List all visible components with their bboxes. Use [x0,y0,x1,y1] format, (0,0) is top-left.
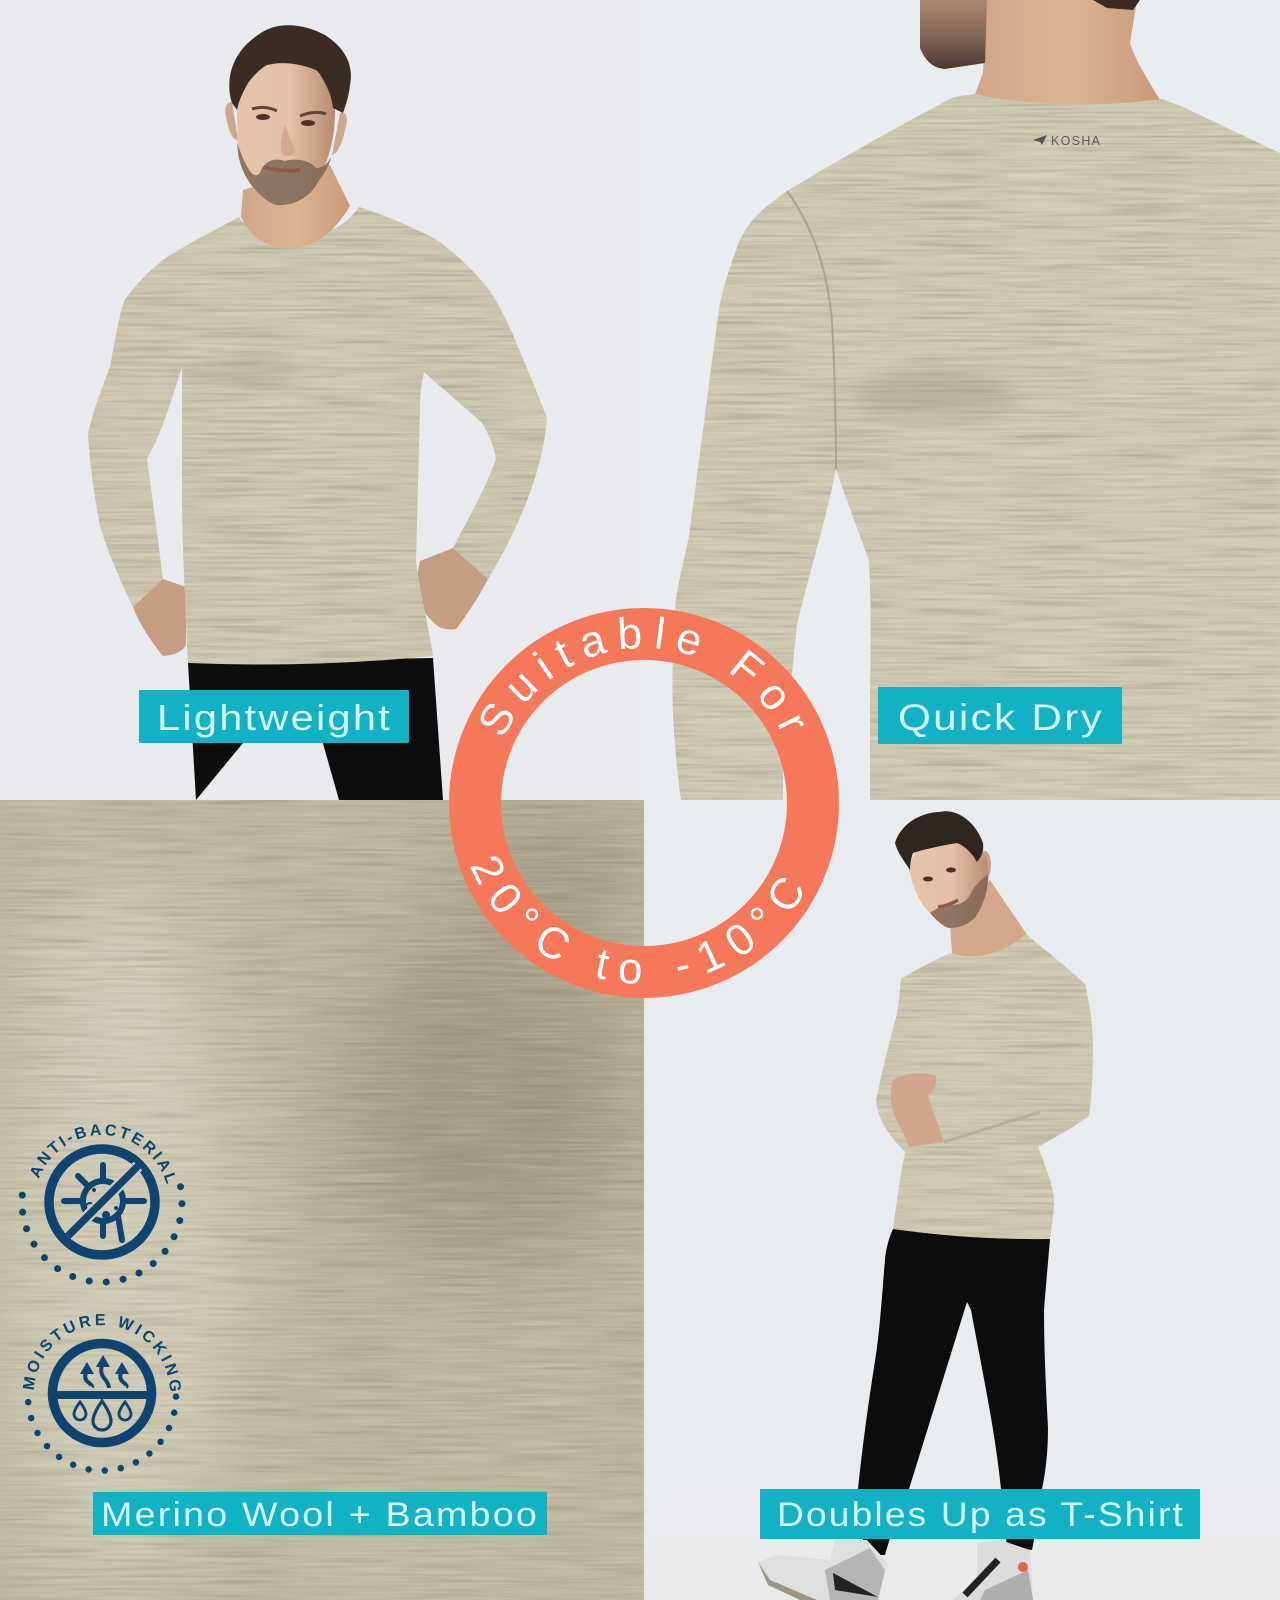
dotted ring [22,1187,182,1282]
label: Doubles Up as T-Shirt: Doubles Up as T-Shirt [777,1496,1185,1534]
long-sleeve top [870,930,1100,1250]
dotted ring [28,1397,176,1471]
neck [950,880,1032,966]
badge text: ANTI-BACTERIAL [30,1124,176,1184]
label: Quick Dry: Quick Dry [898,697,1104,738]
panel: lightweight photo [88,25,547,800]
long-sleeve top [80,200,560,680]
neck hairline [1093,0,1140,10]
face [908,840,988,928]
ring heading: temperature range: 20°C to -10°C [470,856,802,984]
figure: front-facing model [80,25,560,800]
eyes and mouth [923,868,958,907]
leggings [188,658,443,800]
badge: anti-bacterial [18,1124,186,1286]
label: Doubles Up as T-Shirt [760,1489,1200,1539]
badge ring: suitable temperature [449,608,839,998]
badge: moisture wicking [22,1314,181,1474]
label: Lightweight [139,690,409,743]
hands [891,1073,944,1147]
beard [930,875,988,928]
panel: doubles up as t-shirt photo [758,811,1200,1600]
beard [237,143,331,205]
figure: three-quarter model [758,811,1100,1600]
ring heading: Suitable For: Suitable For [480,616,804,734]
ears [225,102,347,155]
eyes and mouth [252,107,326,171]
label: Lightweight: Lightweight [157,697,392,738]
sneaker: left [758,1540,888,1600]
badge text: MOISTURE WICKING [22,1314,181,1391]
icon: crossed-out virus [49,1149,155,1255]
face [237,60,335,204]
hands [133,548,488,656]
ear [979,851,991,879]
label: Quick Dry [878,687,1122,744]
hair [229,25,351,113]
leggings [858,1229,1050,1555]
panel: quick dry photo [640,0,1280,800]
icon: moisture arrows and drops [52,1344,152,1442]
hair [895,811,983,870]
beard [920,0,987,69]
logo: KOSHA: KOSHA [1051,134,1101,148]
neck [241,165,350,248]
back of top [660,90,1280,800]
panel: fabric close-up [0,800,644,1600]
neck close-up [975,0,1160,111]
label: Merino Wool + Bamboo: Merino Wool + Bamboo [101,1496,539,1534]
sneaker: right [953,1540,1033,1600]
